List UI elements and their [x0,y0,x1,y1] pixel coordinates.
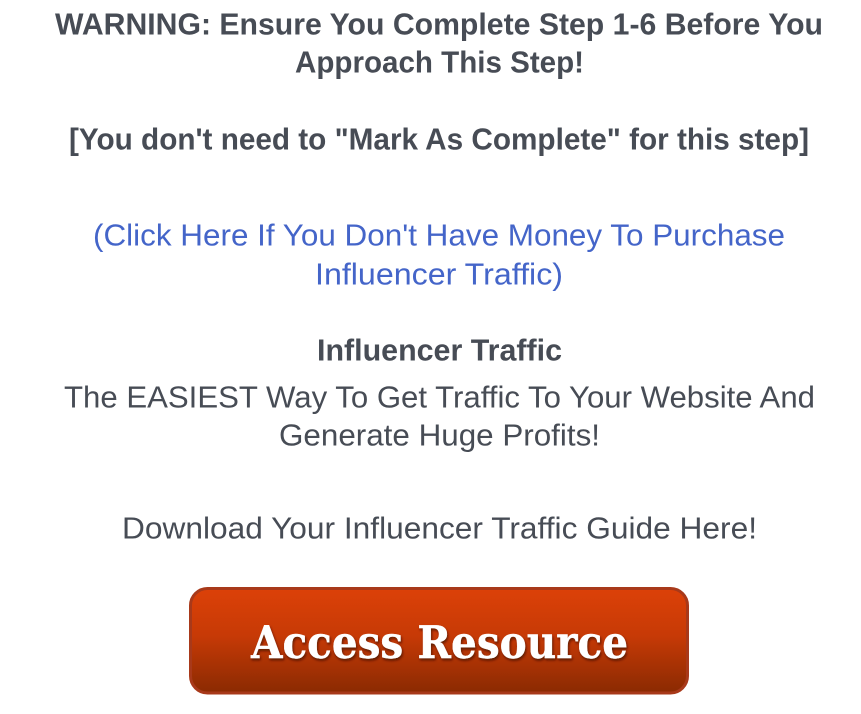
button: access resource: Access Resource [250,616,628,669]
link: no money [93,218,785,292]
button: access resource [190,588,688,693]
description: The EASIEST Way To Get Traffic To Your Website And [64,380,815,414]
download prompt: Download Your Influencer Traffic Guide Here! [122,510,757,546]
link: no money: Influencer Traffic) [315,256,563,292]
section heading: Influencer Traffic [317,332,562,368]
link: no money: (Click Here If You Don't Have Money To Purchase [93,218,785,252]
warning heading: Approach This Step! [295,44,584,80]
description: Generate Huge Profits! [279,418,600,452]
note: mark as complete: [You don't need to "Mark As Complete" for this step] [69,122,809,156]
description [64,380,815,452]
warning heading [55,6,823,80]
warning heading: WARNING: Ensure You Complete Step 1-6 Before You [55,6,823,42]
